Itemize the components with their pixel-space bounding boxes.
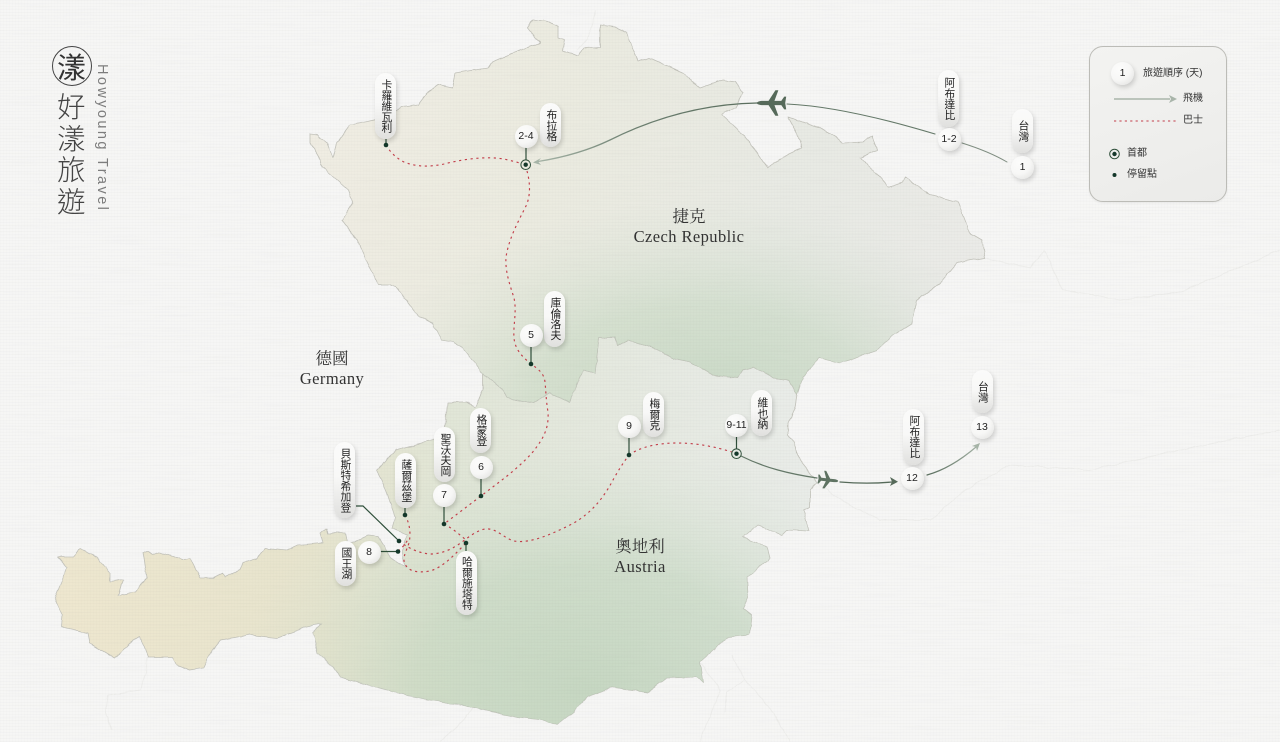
stop: Taiwan 1 day [1011, 156, 1034, 179]
stop: Konigssee day: 8 [366, 546, 372, 558]
logo: 好漾旅遊 [57, 85, 86, 220]
label: Czech Republic: 捷克 [672, 207, 706, 226]
stop: Konigssee name [335, 541, 356, 586]
stop: Hallstatt name: 哈爾施塔特 [460, 556, 472, 610]
stop: Hallstatt name [456, 551, 476, 615]
legend: day order text: 旅遊順序 (天) [1143, 68, 1202, 79]
stop: Gmunden day: 6 [478, 460, 484, 472]
stop: Vienna name: 維也納 [756, 397, 768, 429]
legend [1089, 46, 1227, 202]
stop: St Wolfgang name [434, 427, 455, 482]
label: Germany: 德國 [316, 349, 348, 368]
label: Czech Republic: Czech Republic [634, 227, 744, 246]
stop: Abu Dhabi day [938, 128, 960, 150]
stop: Gmunden name: 格蒙登 [475, 414, 487, 447]
stop: Melk day: 9 [626, 420, 632, 432]
stop: Gmunden day [470, 456, 492, 478]
stop: Taiwan 1 name [1012, 109, 1033, 153]
legend: flight text: 飛機 [1183, 93, 1203, 104]
stop: Abu Dhabi return name [903, 409, 924, 465]
capital marker: Prague [521, 160, 530, 170]
stop: Salzburg name: 薩爾茲堡 [400, 459, 412, 502]
label: Austria: Austria [614, 557, 666, 576]
flight route: Taiwan to Prague [533, 103, 1007, 165]
stop: Cesky Krumlov name: 庫倫洛夫 [549, 297, 561, 341]
country: Austria [55, 337, 817, 725]
stop: St Wolfgang day [432, 484, 456, 506]
stop: Cesky Krumlov name [544, 291, 565, 347]
bus routes [386, 145, 732, 572]
stop: Karlovy Vary name [375, 73, 396, 139]
label: Germany: Germany [300, 369, 364, 388]
stop: Konigssee day [358, 540, 380, 564]
stop: Karlovy Vary name: 卡羅維瓦利 [380, 79, 392, 133]
stop: Prague name [540, 103, 561, 147]
stop: Vienna name [751, 390, 772, 436]
stem lines and stops [356, 139, 736, 552]
stop: Melk name: 梅爾克 [648, 398, 660, 431]
legend: bus text: 巴士 [1183, 115, 1203, 126]
stop: Taiwan return day [970, 416, 994, 438]
stop: Abu Dhabi name: 阿布達比 [943, 77, 955, 120]
stop: St Wolfgang day: 7 [441, 488, 447, 500]
label: Austria: 奧地利 [615, 537, 665, 556]
capital marker: Vienna [732, 449, 741, 459]
stop: Abu Dhabi return day [900, 466, 924, 490]
stop: Taiwan 1 name: 台灣 [1017, 120, 1029, 142]
stop: Cesky Krumlov day [520, 324, 542, 346]
stop: Gmunden name [470, 408, 491, 453]
legend: stop text: 停留點 [1127, 169, 1157, 180]
icon: plane over Austrian border [817, 470, 839, 490]
stop: Melk day [618, 414, 640, 438]
stop: Prague name: 布拉格 [545, 109, 557, 141]
stop: Abu Dhabi return name: 阿布達比 [908, 415, 920, 459]
stop: Prague day: 2-4 [518, 130, 534, 142]
country: Czech Republic [310, 20, 985, 403]
stop: Taiwan 1 day: 1 [1020, 161, 1025, 173]
stop: Melk name [643, 392, 664, 437]
logo: Howyoung Travel [94, 64, 110, 212]
icon: plane over Czech Republic [757, 90, 786, 116]
stop: Abu Dhabi return day: 12 [906, 472, 918, 484]
stop: Taiwan return name: 台灣 [976, 381, 988, 402]
legend: line samples and markers [1109, 95, 1177, 177]
logo [52, 45, 110, 220]
stop: Berchtesgaden name [334, 442, 355, 518]
stop: Vienna day: 9-11 [726, 418, 747, 430]
stop: Prague day [514, 124, 538, 148]
stop: Abu Dhabi name [938, 70, 959, 127]
stop: Taiwan return name [972, 370, 992, 413]
legend: capital text: 首都 [1127, 148, 1147, 159]
stop: Abu Dhabi day: 1-2 [941, 132, 957, 144]
legend: day order badge: 1 [1120, 67, 1125, 79]
stop: Cesky Krumlov day: 5 [528, 328, 534, 340]
stop: Berchtesgaden name: 貝斯特希加登 [339, 448, 351, 512]
logo: 漾 [57, 45, 86, 87]
label: Austria [614, 537, 666, 576]
stop dots [384, 143, 631, 554]
stop: Vienna day [725, 414, 748, 436]
flight route: Vienna to Taiwan [741, 443, 980, 486]
stop: St Wolfgang name: 聖沃夫岡 [439, 433, 451, 476]
stop: Salzburg name [395, 453, 416, 508]
stop: Taiwan return day: 13 [976, 420, 988, 432]
label: Czech Republic [634, 207, 744, 246]
label: Germany [300, 349, 364, 388]
stop: Konigssee name: 國王湖 [340, 547, 352, 580]
legend: day order badge [1111, 62, 1134, 85]
